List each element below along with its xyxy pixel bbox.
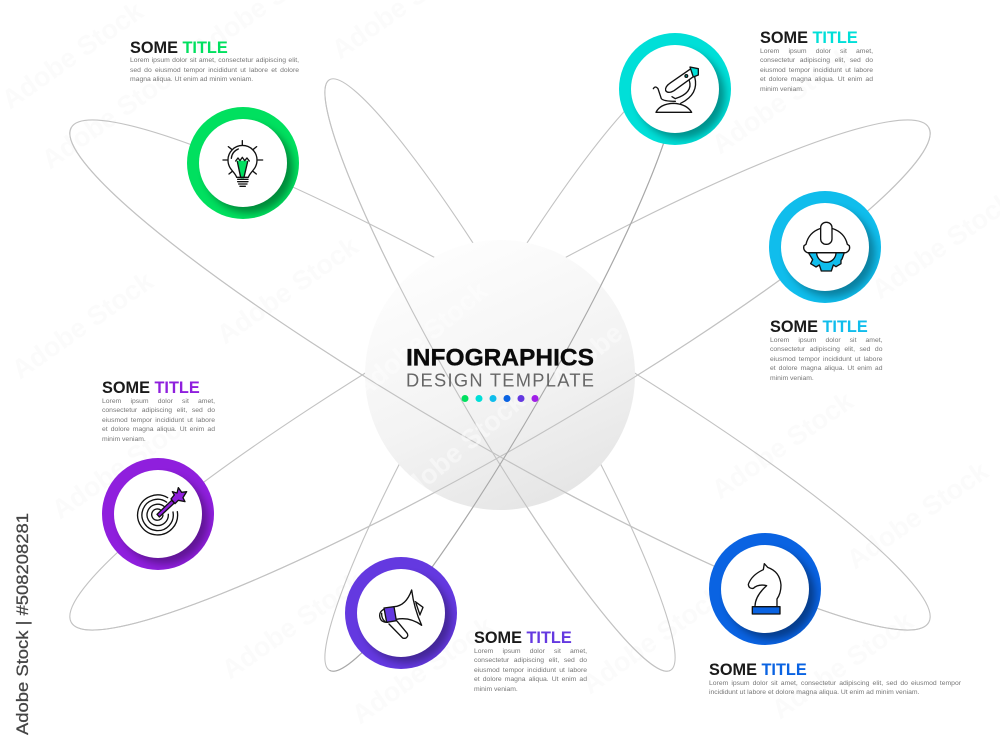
text block: sky blue: consectetur adipiscing elit, sed do [770,346,882,353]
heading: infographics: INFOGRAPHICS [406,344,594,371]
subheading: design template: DESIGN TEMPLATE [406,370,594,391]
text: Adobe Stock [706,40,859,160]
text block: cyan: Lorem ipsum dolor sit amet, [760,48,873,55]
icon: helmet and gear [804,222,850,271]
text block: purple: et dolore magna aliqua. Ut enim ad [102,426,215,433]
text block: indigo: SOME TITLE [474,629,572,647]
text block: purple: consectetur adipiscing elit, sed do [102,407,215,414]
text block: indigo: eiusmod tempor incididunt ut labore [474,667,587,674]
text block: blue: incididunt ut labore et dolore magna aliqua. Ut enim ad minim veniam. [709,689,919,696]
colour dots [462,395,538,402]
text block: purple: minim veniam. [102,436,146,443]
icon: lightbulb [223,141,263,186]
text block: cyan: SOME TITLE [760,29,858,47]
text: Adobe Stock [706,385,859,505]
text block: blue [709,661,961,696]
icon: chess knight [748,564,781,614]
icon: microscope [653,67,698,112]
text block: indigo: consectetur adipiscing elit, sed do [474,657,587,664]
ring: chess knight [709,533,821,645]
text block: purple [102,379,215,443]
text: Adobe Stock [211,230,364,350]
text block: sky blue: SOME TITLE [770,318,868,336]
text block: purple: Lorem ipsum dolor sit amet, [102,398,215,405]
text: Adobe Stock [36,55,189,175]
ring: helmet and gear [769,191,881,303]
ring: target [102,458,214,570]
orbit lines behind sphere [36,57,964,693]
text block: purple: SOME TITLE [102,379,200,397]
text block: cyan [760,29,873,93]
text: Adobe Stock [385,385,531,515]
text block: indigo: minim veniam. [474,686,518,693]
text: Adobe Stock [6,265,159,385]
text: Adobe Stock [841,455,994,575]
text: Adobe Stock [216,565,369,685]
text block: indigo: et dolore magna aliqua. Ut enim ad [474,676,587,683]
text block: sky blue: et dolore magna aliqua. Ut enim ad [770,365,882,372]
text block: green: Lorem ipsum dolor sit amet, consectetur adipiscing elit, [130,57,299,64]
text block: purple: eiusmod tempor incididunt ut labore [102,417,215,424]
text block: cyan: eiusmod tempor incididunt ut labore [760,67,873,74]
icon: target with dart [138,488,187,535]
text: Adobe Stock [46,405,199,525]
text block: indigo [474,629,587,693]
text: Adobe Stock [545,265,691,395]
text block: sky blue: minim veniam. [770,374,814,382]
text block: sky blue: eiusmod tempor incididunt ut labore [770,356,882,362]
text block: cyan: et dolore magna aliqua. Ut enim ad [760,76,873,83]
text block: green: SOME TITLE [130,39,228,57]
text block: blue: SOME TITLE [709,661,807,679]
text block: green [130,39,299,83]
text block: sky blue [770,318,882,382]
ring: megaphone [345,557,457,669]
stock credit: Adobe Stock | #508208281 [13,513,32,735]
central sphere [365,240,635,510]
icon: megaphone [380,590,423,638]
text: Adobe Stock [576,580,729,700]
text block: blue: Lorem ipsum dolor sit amet, consectetur adipiscing elit, sed do eiusmod tempor [709,680,961,686]
orbit lines in front of sphere [36,80,964,693]
text: Adobe Stock [766,605,919,725]
text block: green: magna aliqua. Ut enim ad minim veniam. [130,76,253,83]
text block: green: sed do eiusmod tempor incididunt ut labore et dolore [130,67,299,74]
text: Adobe Stock [346,610,499,730]
ring: lightbulb [187,107,299,219]
text block: cyan: consectetur adipiscing elit, sed do [760,57,873,64]
text block: indigo: Lorem ipsum dolor sit amet, [474,648,587,655]
text block: cyan: minim veniam. [760,86,804,93]
text block: sky blue: Lorem ipsum dolor sit amet, [770,336,882,344]
text: Adobe Stock [348,275,494,405]
ring: microscope [619,33,731,145]
